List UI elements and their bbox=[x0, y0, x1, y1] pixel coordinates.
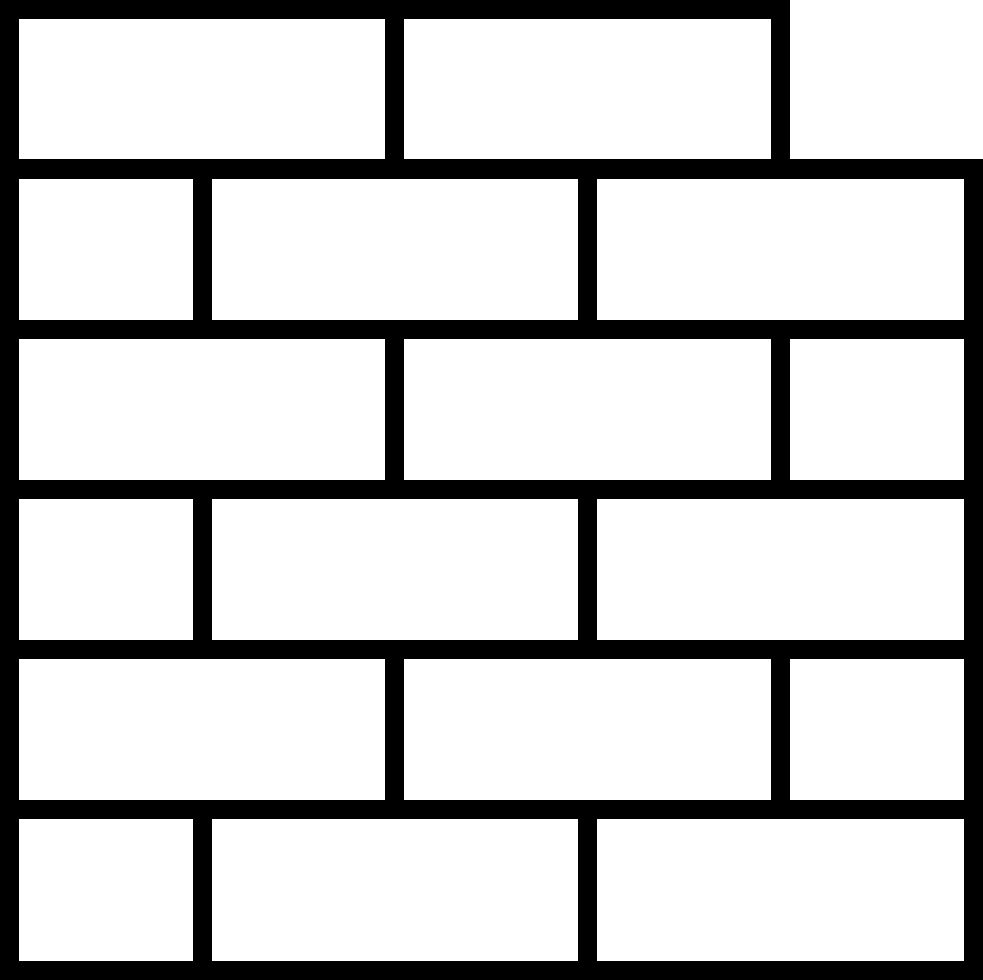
vertical mortar joints bbox=[193, 0, 790, 980]
horizontal mortar lines bbox=[0, 159, 983, 819]
